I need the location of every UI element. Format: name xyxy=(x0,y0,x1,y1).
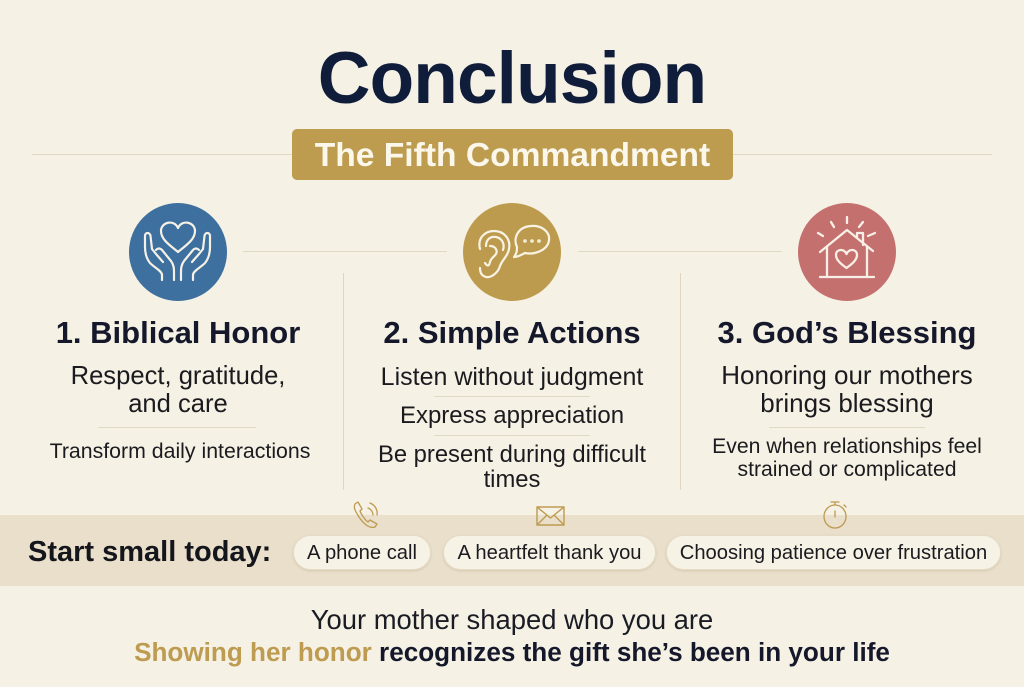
column 2: Simple Actions xyxy=(378,315,646,493)
main text xyxy=(721,360,973,418)
heading: 2. Simple Actions xyxy=(383,315,641,350)
column 1: Biblical Honor xyxy=(50,315,310,463)
band: start small today xyxy=(0,515,1024,586)
pill: thank you: A heartfelt thank you xyxy=(457,542,642,564)
pill: thank you xyxy=(443,535,656,570)
pill: patience xyxy=(666,535,1001,570)
action: be present: Be present during difficult xyxy=(378,441,646,468)
pill: phone call xyxy=(293,535,431,570)
sub text: Even when relationships feel xyxy=(712,435,982,458)
icon: phone xyxy=(354,501,378,528)
closing line: Your mother shaped who you are xyxy=(311,604,713,635)
icon: stopwatch xyxy=(823,501,847,529)
action: listen: Listen without judgment xyxy=(381,363,643,391)
main text: and care xyxy=(128,390,228,418)
main text xyxy=(71,362,285,418)
sub text xyxy=(712,435,982,481)
action: be present: times xyxy=(484,466,540,493)
subtitle banner: The Fifth Commandment xyxy=(315,137,710,174)
main text: Respect, gratitude, xyxy=(71,362,285,390)
band label: Start small today: xyxy=(28,536,271,568)
icon: hands holding heart xyxy=(129,203,227,301)
action: appreciation: Express appreciation xyxy=(400,402,624,429)
column 3: God's Blessing xyxy=(712,315,982,481)
sub text: Transform daily interactions xyxy=(50,439,310,463)
icon: envelope xyxy=(536,506,565,526)
main text: brings blessing xyxy=(760,388,934,418)
closing emphasis: Showing her honor recognizes the gift she’s been in your life xyxy=(134,637,890,667)
action: be present xyxy=(378,441,646,493)
subtitle banner xyxy=(292,129,733,180)
icon: house with heart xyxy=(798,203,896,301)
heading: 3. God’s Blessing xyxy=(718,315,976,350)
icon: ear and speech bubble xyxy=(463,203,561,301)
pill: phone call: A phone call xyxy=(307,542,417,564)
heading: 1. Biblical Honor xyxy=(56,315,300,350)
title: Conclusion xyxy=(318,38,706,119)
sub text: strained or complicated xyxy=(737,458,957,481)
main text: Honoring our mothers xyxy=(721,360,973,390)
pill: patience: Choosing patience over frustration xyxy=(680,542,987,564)
